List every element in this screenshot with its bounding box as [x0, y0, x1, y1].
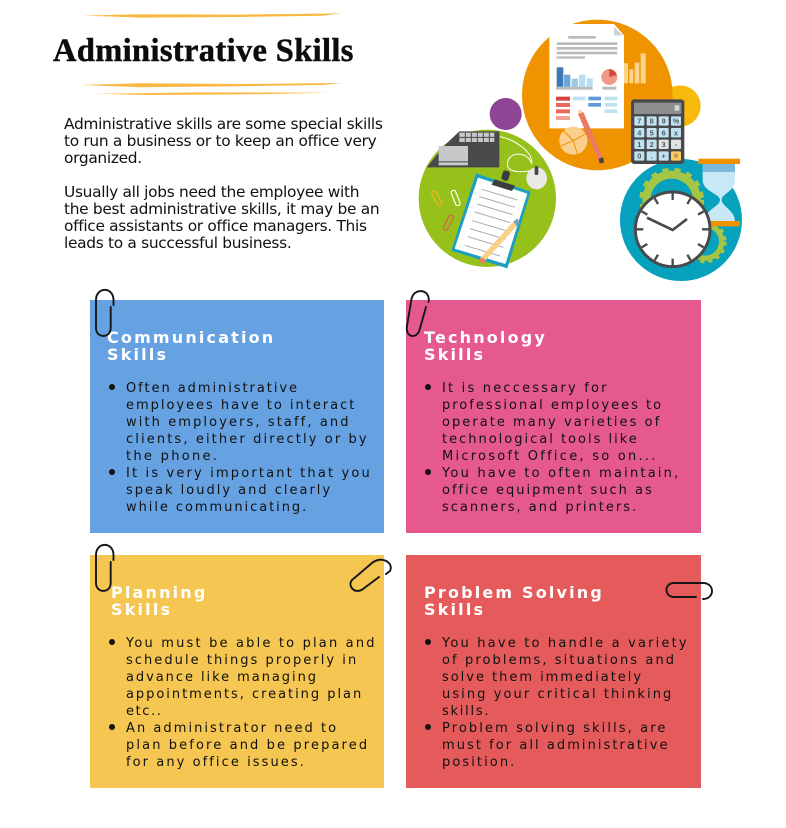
list: planning skills: schedule things properly in: [126, 653, 358, 668]
icon: purple circle: [490, 98, 522, 130]
intro text: Usually all jobs need the employee with: [64, 183, 359, 201]
list: planning skills: plan before and be prepared: [126, 738, 369, 753]
intro text: [64, 115, 383, 252]
list: planning skills: An administrator need to: [126, 721, 338, 736]
icon: calculator: 6: [662, 128, 666, 137]
list: communication skills: speak loudly and clearly: [126, 483, 332, 498]
icon: calculator: .: [651, 152, 653, 161]
icon: report document: [549, 24, 624, 128]
list: planning skills: You must be able to plan and: [126, 636, 377, 651]
icon: gears: [642, 170, 725, 262]
icon: calculator: [631, 99, 684, 164]
icon: calculator: %: [673, 117, 680, 126]
icon: calculator: 0: [637, 152, 641, 161]
list: problem solving skills: must for all administrative: [442, 738, 670, 753]
icon: clip on problem solving panel: [666, 583, 712, 599]
panel: technology skills: [406, 300, 701, 533]
intro text: leads to a successful business.: [64, 234, 291, 252]
intro text: the best administrative skills, it may be an: [64, 200, 379, 218]
intro text: to run a business or to keep an office very: [64, 132, 376, 150]
icon: clip on planning panel corner: [350, 560, 391, 591]
heading: planning skills: Skills: [111, 600, 172, 619]
list: planning skills: [109, 636, 377, 770]
icon: small bar chart: [624, 53, 646, 83]
list: communication skills: It is very important that you: [126, 466, 372, 481]
icon: calculator: 1: [637, 140, 641, 149]
heading: technology skills: Skills: [424, 345, 485, 364]
list: planning skills: for any office issues.: [126, 755, 306, 770]
list: communication skills: while communicating.: [126, 500, 308, 515]
intro text: office assistants or office managers. This: [64, 217, 367, 235]
icon: calculator: =: [674, 152, 678, 161]
panel: planning skills: [90, 555, 384, 788]
panel: communication skills: [90, 300, 384, 533]
list: technology skills: technological tools like: [442, 432, 639, 447]
list: problem solving skills: You have to handle a variety: [442, 636, 689, 651]
intro text: organized.: [64, 149, 142, 167]
icon: calculator: 4: [637, 128, 642, 137]
heading: problem solving skills: Skills: [424, 600, 485, 619]
heading: technology skills: Technology: [424, 328, 547, 347]
list: problem solving skills: position.: [442, 755, 516, 770]
icon: calculator: 2: [650, 140, 654, 149]
list: communication skills: with employers, staff, and: [126, 415, 351, 430]
icon: pencil: [578, 109, 604, 163]
heading: planning skills: Planning: [111, 583, 207, 602]
icon: calculator: +: [662, 152, 666, 161]
icon: calculator: 9: [662, 117, 666, 126]
list: technology skills: operate many varieties of: [442, 415, 661, 430]
heading: communication skills: Skills: [107, 345, 168, 364]
panel: problem solving skills: [406, 555, 701, 788]
list: planning skills: appointments, creating plan: [126, 687, 363, 702]
list: technology skills: office equipment such as: [442, 483, 654, 498]
list: technology skills: professional employees to: [442, 398, 663, 413]
list: planning skills: etc..: [126, 704, 163, 719]
heading: problem solving skills: [424, 583, 604, 619]
icon: calculator: x: [674, 128, 679, 137]
list: problem solving skills: solve them immediately: [442, 670, 643, 685]
intro text: Administrative skills are some special skills: [64, 115, 383, 133]
icon: paper clips: [431, 190, 461, 231]
list: technology skills: It is neccessary for: [442, 381, 609, 396]
illustration: office tools: [418, 20, 742, 281]
icon: orange circle: [522, 20, 673, 170]
list: communication skills: Often administrative: [126, 381, 299, 396]
list: communication skills: the phone.: [126, 449, 219, 464]
icon: teal circle: [620, 159, 742, 281]
heading: planning skills: [111, 583, 207, 619]
list: problem solving skills: using your critical thinking: [442, 687, 673, 702]
heading: technology skills: [424, 328, 547, 364]
title: Administrative Skills: [53, 33, 354, 69]
list: technology skills: You have to often maintain,: [442, 466, 680, 481]
icon: pie chart: [559, 127, 587, 155]
list: technology skills: scanners, and printers.: [442, 500, 638, 515]
list: communication skills: [109, 381, 372, 515]
list: communication skills: employees have to interact: [126, 398, 356, 413]
list: problem solving skills: [425, 636, 689, 770]
icon: yellow circle: [659, 85, 701, 127]
icon: calculator: 8: [650, 117, 654, 126]
list: problem solving skills: of problems, situations and: [442, 653, 676, 668]
icon: calculator: 5: [650, 128, 654, 137]
icon: clip on communication panel: [96, 290, 114, 336]
list: problem solving skills: Problem solving skills, are: [442, 721, 667, 736]
icon: calculator: 3: [662, 140, 666, 149]
list: problem solving skills: skills.: [442, 704, 490, 719]
heading: communication skills: Communication: [107, 328, 275, 347]
icon: clip on technology panel: [407, 291, 429, 336]
heading: communication skills: [107, 328, 275, 364]
decorative brush strokes around title: [82, 13, 342, 95]
icon: laptop: [427, 131, 499, 167]
icon: calculator: 7: [637, 117, 641, 126]
list: communication skills: clients, either directly or by: [126, 432, 369, 447]
list: technology skills: [425, 381, 680, 515]
heading: problem solving skills: Problem Solving: [424, 583, 604, 602]
list: technology skills: Microsoft Office, so on...: [442, 449, 658, 464]
icon: clip on planning panel: [96, 545, 114, 591]
list: planning skills: advance like managing: [126, 670, 318, 685]
icon: calculator: -: [675, 140, 678, 149]
icon: hourglass: [698, 159, 740, 226]
icon: clock: [635, 192, 710, 267]
icon: green circle: [419, 130, 556, 267]
icon: clipboard: [451, 170, 531, 268]
icon: computer mouse: [500, 137, 547, 189]
